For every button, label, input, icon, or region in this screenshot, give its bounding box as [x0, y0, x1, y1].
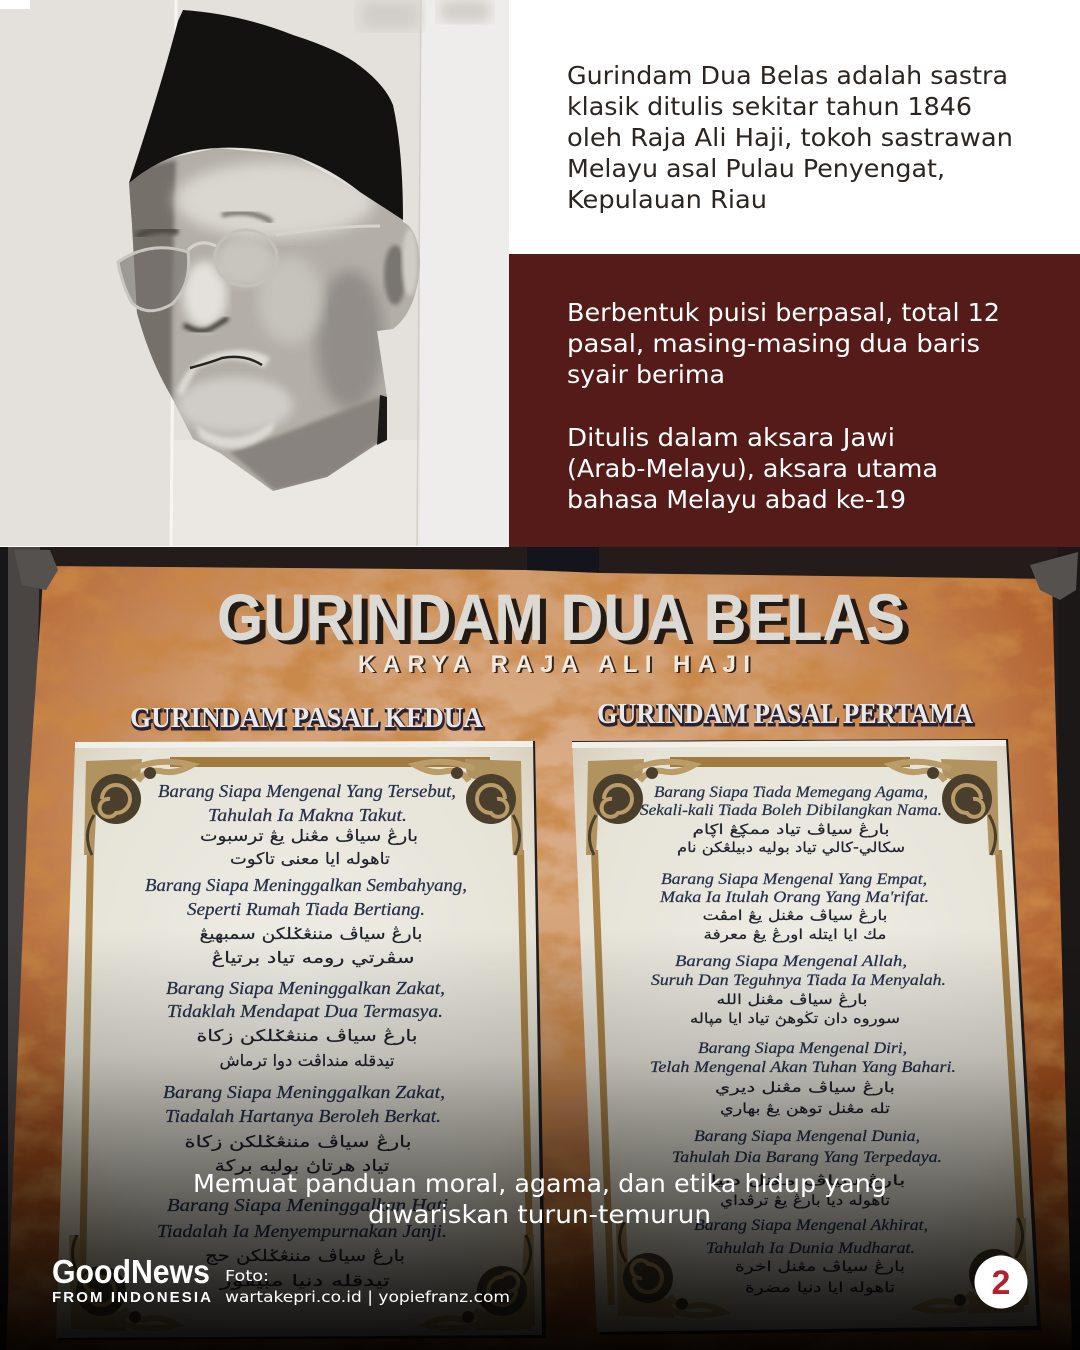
plaque: pasal pertama: [572, 739, 1041, 1335]
board background: [0, 560, 1080, 1350]
collar shadow: [377, 395, 387, 445]
intro paragraph: oleh Raja Ali Haji, tokoh sastrawan: [567, 123, 1013, 152]
plaque verses: تاهوله ايا دنيا مضرة: [745, 1280, 895, 1296]
plaque verses: Tiadalah Hartanya Beroleh Berkat.: [165, 1106, 441, 1126]
logo: GoodNews from Indonesia: GoodNews: [52, 1253, 210, 1290]
fact: form of the poem: syair berima: [567, 360, 725, 389]
intro paragraph: Kepulauan Riau: [567, 185, 767, 214]
plaque verses: Barang Siapa Mengenal Akhirat,: [694, 1217, 928, 1234]
section heading: pasal kedua: GURINDAM PASAL KEDUA: [131, 704, 484, 736]
fact: form of the poem: Berbentuk puisi berpasal, total 12: [567, 298, 1000, 327]
corner brackets: [14, 550, 1078, 600]
plaque ornament frame: [586, 757, 1029, 1318]
plaque verses: Maka Ia Itulah Orang Yang Ma'rifat.: [659, 889, 929, 906]
plaque verses: Telah Mengenal Akan Tuhan Yang Bahari.: [650, 1059, 956, 1076]
hat: [129, 10, 403, 220]
intro paragraph: Gurindam Dua Belas adalah sastra: [567, 61, 1008, 90]
fact: script used: [567, 423, 938, 514]
plaque verses: سكالي-كالي تياد بوليه دبيلڠكن نام: [677, 840, 905, 856]
plaque verses: Tidaklah Mendapat Dua Termasya.: [167, 1001, 443, 1021]
plaque verses: تاهوله ايا معنى تاكوت: [230, 849, 390, 869]
photo credit: wartakepri.co.id | yopiefranz.com: [225, 1288, 510, 1306]
fact: script used: Ditulis dalam aksara Jawi: [567, 423, 895, 452]
plaque verses: سڤرتي رومه تياد برتياڠ: [212, 948, 414, 968]
board subtitle: KARYA RAJA ALI HAJI: [358, 651, 750, 678]
plaque verses: Barang Siapa Meninggalkan Hati: [167, 1195, 448, 1215]
panel: facts (dark maroon): [509, 254, 1080, 547]
plaque verses: Barang Siapa Meninggalkan Zakat,: [163, 1082, 445, 1102]
fact: script used: (Arab-Melayu), aksara utama: [567, 454, 938, 483]
plaque verses: تله مڠنل توهن يڠ بهاري: [720, 1101, 890, 1117]
small sign at top of board: [527, 547, 599, 575]
plaque verses: تاهوله ديا بارڠ يڠ ترڤداي: [720, 1193, 890, 1209]
plaque verses: بارڠ سياڤ مڠنل الله: [716, 992, 868, 1008]
plaque verses: Barang Siapa Mengenal Allah,: [675, 953, 907, 970]
fact: script used: bahasa Melayu abad ke-19: [567, 485, 906, 514]
plaque verses: سوروه دان تڬوهڽ تياد ايا مڽاله: [690, 1011, 900, 1027]
plaque ornament frame: [69, 757, 535, 1331]
plaque verses: Barang Siapa Meninggalkan Zakat,: [166, 978, 445, 998]
plaque verses: Suruh Dan Teguhnya Tiada Ia Menyalah.: [651, 972, 946, 989]
plaque verses: [640, 784, 956, 1296]
caption: [193, 1169, 887, 1229]
photo credit: [225, 1267, 510, 1306]
section heading: pasal kedua: GURINDAM PASAL KEDUA: [130, 702, 483, 734]
board subtitle: KARYA RAJA ALI HAJI: [360, 652, 752, 679]
plaque verses: Seperti Rumah Tiada Bertiang.: [187, 899, 425, 919]
plaque verses: Tahulah Ia Makna Takut.: [208, 805, 407, 825]
page number badge: 2: [992, 1264, 1010, 1302]
fact: form of the poem: pasal, masing-masing dua baris: [567, 329, 980, 358]
plaque verses: Barang Siapa Meninggalkan Sembahyang,: [145, 875, 467, 895]
plaque verses: [145, 781, 467, 1291]
board title: GURINDAM DUA BELAS: [217, 580, 905, 654]
plaque verses: Tahulah Ia Dunia Mudharat.: [706, 1240, 915, 1257]
intro paragraph: Melayu asal Pulau Penyengat,: [567, 154, 945, 183]
glasses: [118, 226, 380, 311]
photo: Gurindam Dua Belas signboard: [0, 547, 1080, 1350]
page number badge: [974, 1256, 1028, 1308]
plaque verses: بارڠ سياڤ مننڠݢلكن حج: [205, 1246, 405, 1266]
plaque verses: بارڠ سياڤ مننڠݢلكن سمبهيڠ: [200, 924, 422, 944]
caption: diwariskan turun-temurun: [368, 1200, 711, 1229]
plaque verses: بارڠ سياڤ مڠنل دنيا: [710, 1173, 906, 1189]
intro paragraph: [567, 61, 1013, 214]
plaque verses: Tahulah Dia Barang Yang Terpedaya.: [672, 1149, 942, 1166]
plaque verses: بارڠ سياڤ مڠنل يڠ ترسبوت: [200, 826, 418, 846]
portrait photo of Raja Ali Haji: [0, 0, 509, 546]
logo: GoodNews from Indonesia: FROM INDONESIA: [52, 1289, 211, 1306]
plaque verses: تيدقله دنيا مبيقور: [218, 1271, 390, 1291]
plaque verses: بارڠ سياڤ مننڠݢلكن زكاة: [196, 1026, 418, 1046]
photo credit: Foto:: [225, 1267, 269, 1285]
board title: GURINDAM DUA BELAS: [223, 584, 911, 658]
plaque: pasal kedua: [56, 741, 546, 1340]
dark gradient overlay on photo: [0, 930, 1080, 1350]
plaque verses: Barang Siapa Mengenal Yang Empat,: [661, 871, 927, 888]
plaque verses: تياد هرتاڽ بوليه بركة: [214, 1156, 390, 1176]
plaque verses: Barang Siapa Mengenal Dunia,: [694, 1128, 920, 1145]
plaque verses: بارڠ سياڤ تياد ممڮڠ اڮام: [692, 822, 890, 839]
plaque verses: بارڠ سياڤ مڠنل اخرة: [735, 1259, 905, 1275]
plaque verses: تيدقله منداڤت دوا ترماش: [220, 1051, 394, 1071]
face: [129, 148, 420, 491]
fact: form of the poem: [567, 298, 1000, 389]
plaque verses: بارڠ سياڤ مڠنل ديري: [715, 1080, 895, 1096]
logo: GoodNews from Indonesia: [52, 1253, 211, 1306]
plaque verses: مك ايا ايتله اورڠ يڠ معرفة: [704, 927, 886, 943]
plaque verses: Sekali-kali Tiada Boleh Dibilangkan Nama.: [640, 802, 942, 819]
caption: Memuat panduan moral, agama, dan etika hidup yang: [193, 1169, 887, 1198]
plaque verses: Barang Siapa Mengenal Yang Tersebut,: [158, 781, 456, 801]
plaque verses: Barang Siapa Mengenal Diri,: [698, 1040, 907, 1057]
section heading: pasal pertama: GURINDAM PASAL PERTAMA: [597, 698, 973, 730]
section heading: pasal pertama: GURINDAM PASAL PERTAMA: [598, 700, 974, 732]
plaque verses: بارڠ سياڤ مڠنل يڠ امڤت: [702, 908, 888, 924]
plaque verses: Barang Siapa Tiada Memegang Agama,: [654, 784, 928, 801]
plaque verses: Tiadalah Ia Menyempurnakan Janji.: [157, 1221, 447, 1241]
intro paragraph: klasik ditulis sekitar tahun 1846: [567, 92, 972, 121]
plaque verses: بارڠ سياڤ مننڠݢلكن زكاة: [184, 1132, 412, 1152]
panel: intro text (white): [509, 0, 1080, 254]
